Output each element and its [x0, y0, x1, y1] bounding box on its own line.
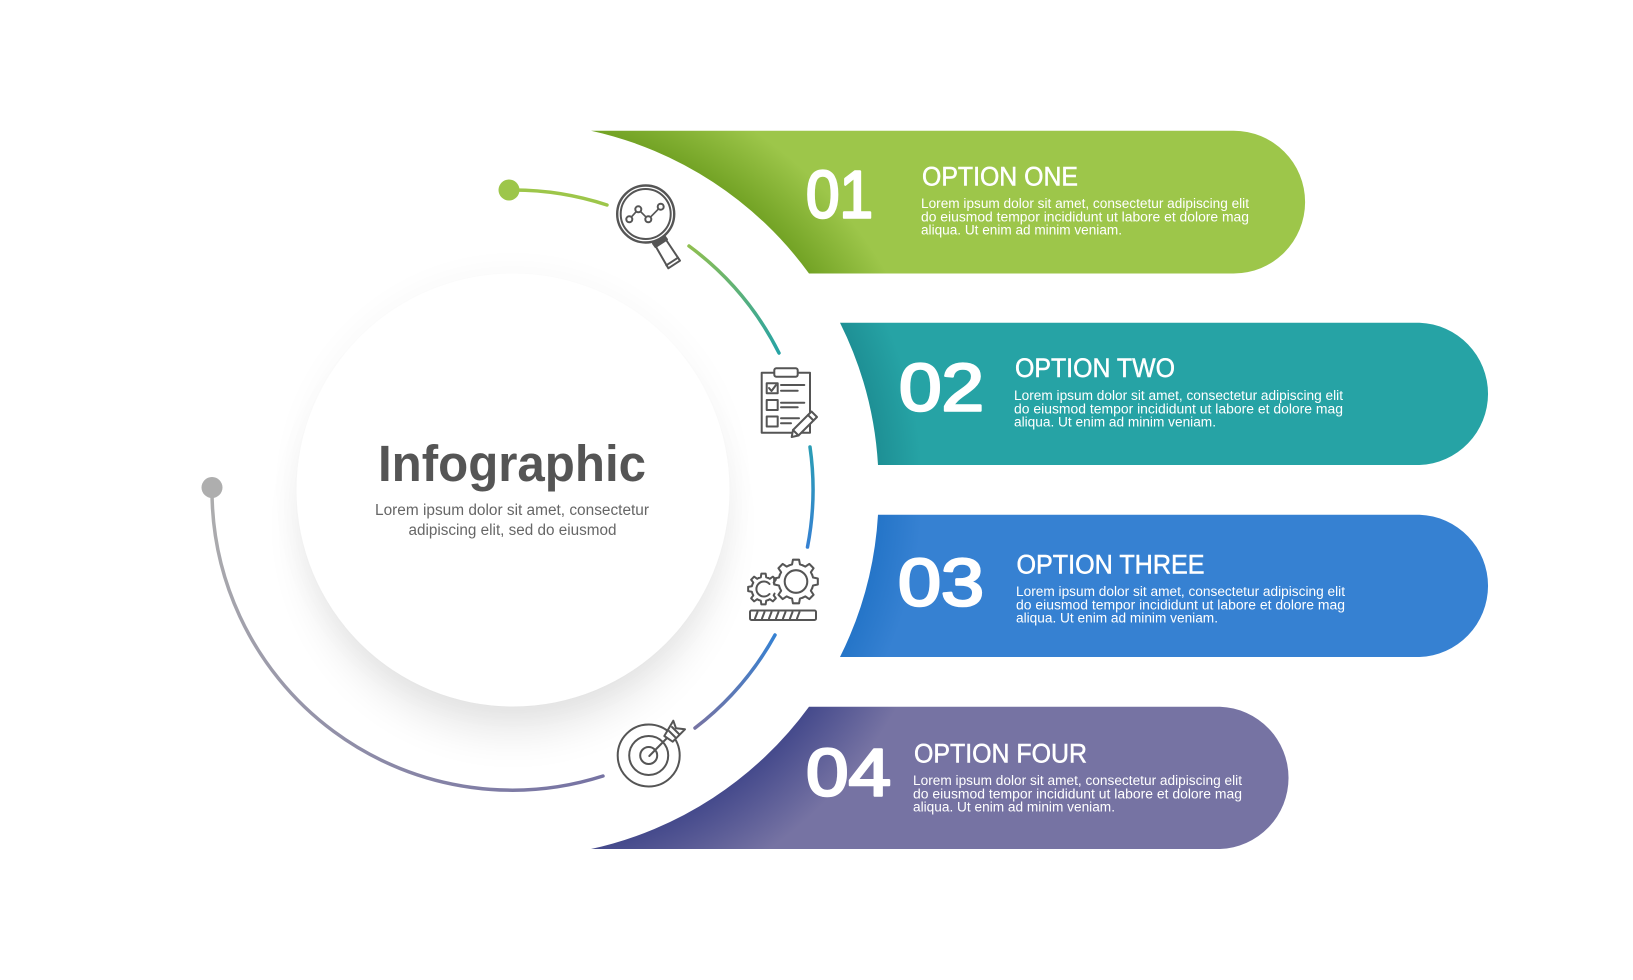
body text option three: do eiusmod tempor incididunt ut labore et dolore mag — [1016, 597, 1345, 612]
icon: gears with progress bar — [748, 560, 818, 620]
panel: option one — [591, 131, 1305, 274]
number 01: 01 — [806, 158, 873, 232]
body text option three — [1016, 584, 1345, 625]
timeline arc segment: green start with dot — [498, 180, 607, 205]
body text option one — [921, 196, 1249, 238]
body text option one: Lorem ipsum dolor sit amet, consectetur adipiscing elit — [921, 196, 1249, 211]
body text option two: Lorem ipsum dolor sit amet, consectetur adipiscing elit — [1014, 388, 1343, 403]
panel: option three — [840, 515, 1488, 657]
heading option four: OPTION FOUR — [914, 738, 1087, 768]
number 03: 03 — [898, 546, 984, 621]
icon: target with arrow — [618, 721, 685, 786]
body text option four: do eiusmod tempor incididunt ut labore et dolore mag — [913, 786, 1242, 801]
center description: Lorem ipsum dolor sit amet, consectetur — [375, 502, 649, 519]
title: Infographic — [378, 435, 646, 492]
green banner shape — [591, 131, 1305, 274]
panel: option four — [591, 707, 1289, 849]
heading option three: OPTION THREE — [1016, 550, 1204, 580]
purple banner shape — [591, 707, 1289, 849]
body text option four: Lorem ipsum dolor sit amet, consectetur adipiscing elit — [913, 773, 1242, 788]
number 04: 04 — [806, 736, 891, 811]
center description: adipiscing elit, sed do eiusmod — [408, 522, 616, 539]
icon: magnifier with chart — [617, 186, 680, 268]
body text option two: aliqua. Ut enim ad minim veniam. — [1014, 414, 1216, 429]
timeline arc segment: blue to purple — [695, 635, 775, 728]
body text option three: aliqua. Ut enim ad minim veniam. — [1016, 610, 1218, 625]
body text option one: do eiusmod tempor incididunt ut labore et dolore mag — [921, 210, 1249, 224]
body text option three: Lorem ipsum dolor sit amet, consectetur adipiscing elit — [1016, 584, 1345, 599]
body text option four: aliqua. Ut enim ad minim veniam. — [913, 799, 1115, 814]
body text option two — [1014, 388, 1343, 429]
number 02: 02 — [899, 350, 984, 425]
timeline arc segment: green to teal — [689, 246, 779, 353]
center description — [375, 502, 649, 539]
teal banner shape — [840, 323, 1488, 465]
heading option two: OPTION TWO — [1015, 353, 1175, 383]
timeline arc segment: purple to grey with dot — [202, 477, 603, 790]
heading option one: OPTION ONE — [922, 162, 1078, 192]
timeline arc segment: teal to blue — [808, 447, 813, 547]
center circle with soft shadow — [289, 266, 737, 731]
icon: clipboard checklist with pencil — [762, 368, 817, 437]
body text option one: aliqua. Ut enim ad minim veniam. — [921, 222, 1122, 238]
body text option four — [913, 773, 1242, 814]
panel: option two — [840, 323, 1488, 465]
blue banner shape — [840, 515, 1488, 657]
body text option two: do eiusmod tempor incididunt ut labore et dolore mag — [1014, 401, 1343, 416]
